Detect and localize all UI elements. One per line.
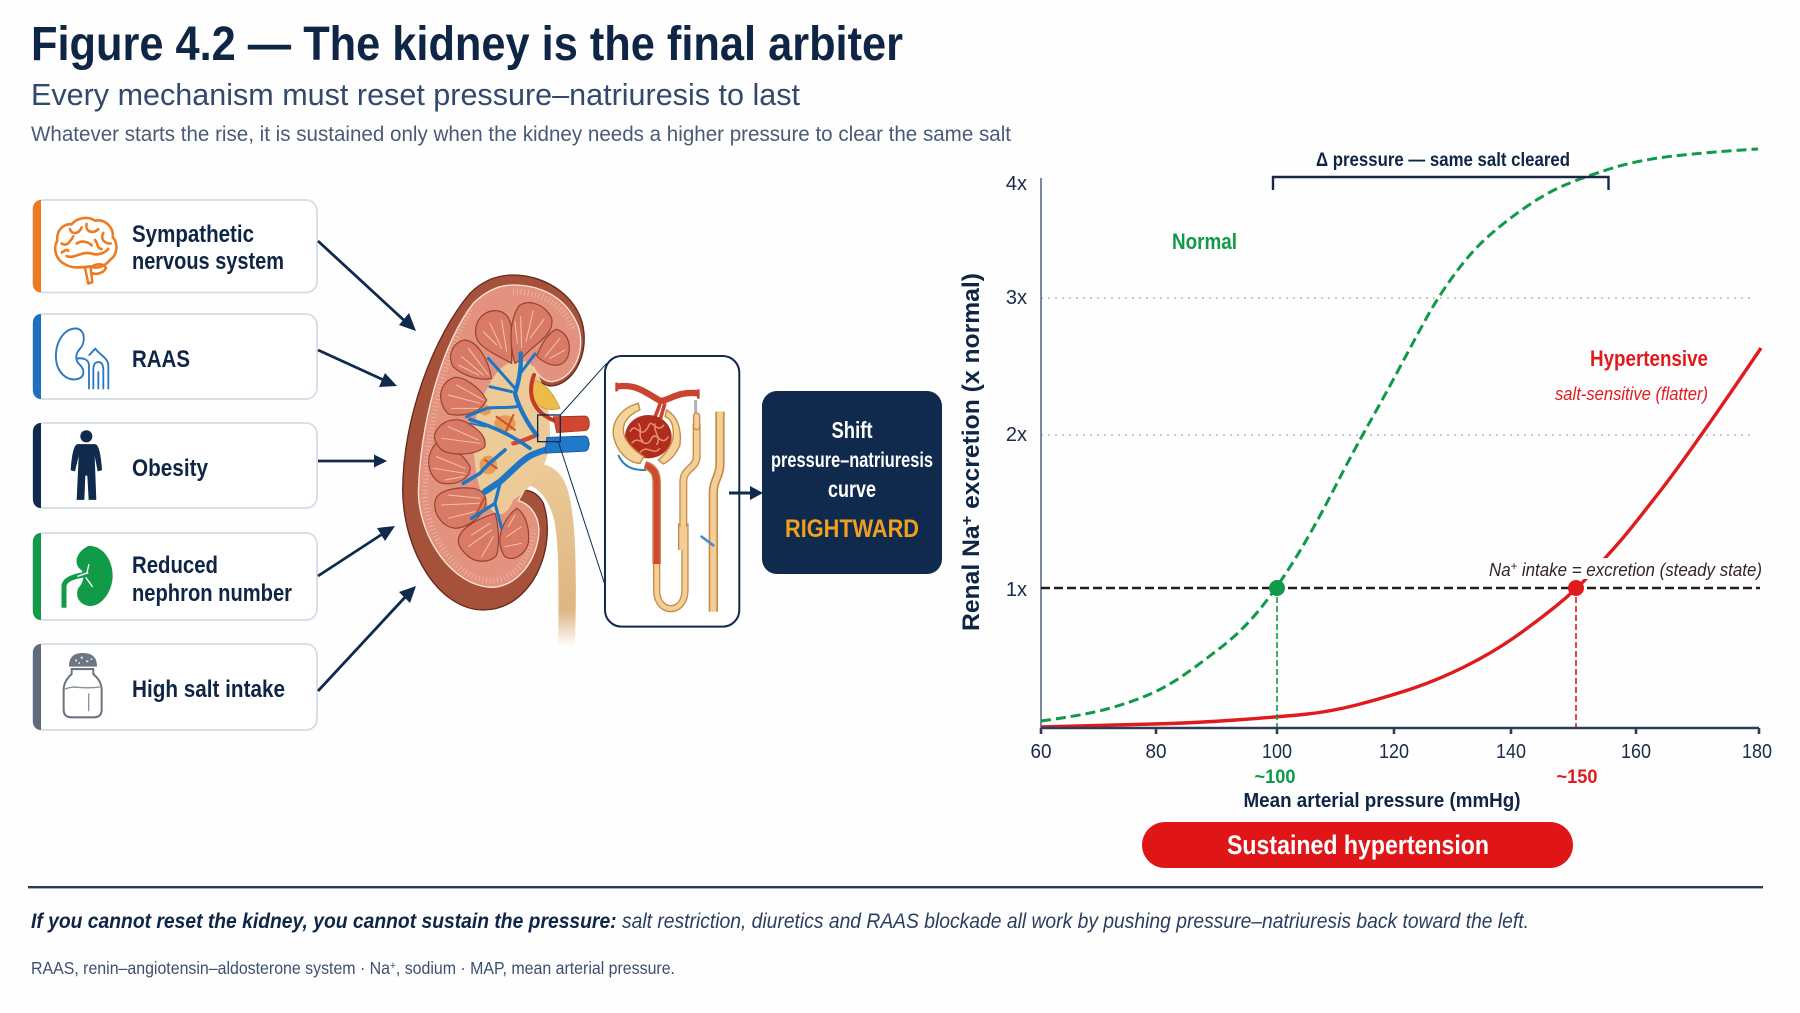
footnote: + xyxy=(390,960,396,972)
x tick labels: 140 xyxy=(1496,741,1526,763)
pill: sustained hypertension xyxy=(1142,822,1573,868)
pyramid streaks xyxy=(433,311,565,557)
card: sympathetic nervous system: nervous system xyxy=(132,248,284,275)
card: reduced nephron number xyxy=(33,533,317,620)
callout: shift curve rightward: Shift xyxy=(832,417,873,443)
arterioles xyxy=(617,386,698,401)
x tick labels: 100 xyxy=(1262,741,1292,763)
x tick labels: 180 xyxy=(1742,741,1772,763)
operating point: normal xyxy=(1269,580,1285,596)
x tick labels: 160 xyxy=(1621,741,1651,763)
illustration: kidney cross-section xyxy=(403,275,607,647)
y axis title: excretion (x normal) xyxy=(958,273,985,516)
bracket: delta pressure: Δ pressure — same salt cleared xyxy=(1316,149,1570,171)
callout: shift curve rightward: pressure–natriuresis xyxy=(771,449,933,472)
y tick labels: 2x xyxy=(1006,424,1027,446)
arrow: inset to shift box xyxy=(729,486,763,500)
card: obesity xyxy=(33,423,317,508)
bracket: delta pressure xyxy=(1273,149,1608,190)
arrows: mechanisms to kidney xyxy=(318,241,416,691)
footnote: , sodium · MAP, mean arterial pressure. xyxy=(396,958,675,978)
label: hypertensive: Hypertensive xyxy=(1590,346,1708,371)
label: High salt intake xyxy=(132,676,285,703)
x axis title: Mean arterial pressure (mmHg) xyxy=(1244,789,1520,812)
card: sympathetic nervous system xyxy=(33,200,317,292)
x tick labels xyxy=(1030,741,1772,763)
icon: person xyxy=(71,430,102,500)
cortex xyxy=(418,285,581,587)
steady state label: Na xyxy=(1489,560,1512,580)
icon: salt shaker xyxy=(64,653,102,717)
renal sinus xyxy=(473,360,550,514)
card: high salt intake xyxy=(33,644,317,730)
label background gap xyxy=(1489,558,1763,579)
x axis xyxy=(1041,728,1759,734)
steady state label: + xyxy=(1511,559,1517,573)
Bowman capsule xyxy=(613,403,644,463)
sinus vessels xyxy=(475,375,565,517)
y axis xyxy=(1040,178,1042,728)
y tick labels: 3x xyxy=(1006,287,1027,309)
y axis title: Renal Na xyxy=(958,528,985,631)
y axis title: + xyxy=(959,516,976,525)
chart: pressure-natriuresis curves xyxy=(958,149,1772,812)
icon: brain xyxy=(55,218,116,284)
arrow: salt to kidney xyxy=(318,586,416,691)
renal vein tree xyxy=(463,353,587,528)
zoom box and guide lines xyxy=(538,363,607,585)
normal curve xyxy=(1041,149,1758,721)
x tick labels: 80 xyxy=(1146,741,1166,763)
steady state label: intake = excretion (steady state) xyxy=(1517,560,1762,580)
takeaway: If you cannot reset the kidney, you cannot sustain the pressure: salt restriction, diuretics and RAAS blockade all work by pushing pressure–natriuresis back toward the left. xyxy=(31,909,1529,933)
icon: green kidney xyxy=(64,546,113,608)
y tick labels: 4x xyxy=(1006,173,1027,195)
icon: kidney and nephron outline xyxy=(56,328,108,388)
callout: shift curve rightward: curve xyxy=(828,476,876,502)
sinus orange patches xyxy=(479,405,516,474)
description line: Whatever starts the rise, it is sustained only when the kidney needs a higher pressure to clear the same salt xyxy=(31,123,1011,146)
operating point: hypertensive xyxy=(1568,580,1584,596)
y tick labels: 1x xyxy=(1006,579,1027,601)
callout: shift curve rightward: RIGHTWARD xyxy=(785,515,919,543)
renal artery xyxy=(553,416,589,433)
title: Figure 4.2 — The kidney is the final arbiter xyxy=(31,18,903,71)
arrow: sympathetic to kidney xyxy=(318,241,416,331)
hypertensive curve xyxy=(1041,348,1761,727)
arrow: nephron number to kidney xyxy=(318,526,395,576)
inset: nephron xyxy=(605,356,739,627)
drop lines xyxy=(1276,588,1278,728)
label: salt-sensitive: salt-sensitive (flatter) xyxy=(1555,384,1708,404)
x tick labels: 120 xyxy=(1379,741,1409,763)
marker: ~150: ~150 xyxy=(1556,766,1598,788)
x tick labels: 60 xyxy=(1030,741,1052,763)
footnote: RAAS, renin–angiotensin–aldosterone system · Na xyxy=(31,958,426,978)
label: Obesity xyxy=(132,455,209,482)
ureter xyxy=(507,464,576,647)
card: reduced nephron number: nephron number xyxy=(132,580,292,607)
callout: shift curve rightward xyxy=(762,391,942,574)
card: RAAS xyxy=(33,314,317,399)
glomerulus xyxy=(625,415,672,458)
label: normal: Normal xyxy=(1172,229,1237,254)
renal vein xyxy=(545,436,589,453)
cortex texture xyxy=(425,292,573,581)
pill: sustained hypertension: Sustained hypertension xyxy=(1227,830,1489,860)
tubule xyxy=(645,412,720,612)
capsule xyxy=(403,275,584,610)
label: RAAS xyxy=(132,346,190,373)
label: Reduced xyxy=(132,552,218,579)
arrow: obesity to kidney xyxy=(318,454,387,468)
pyramids xyxy=(429,303,569,561)
perirenal fat xyxy=(532,380,560,410)
divider xyxy=(28,886,1763,888)
gridlines xyxy=(1041,298,1754,435)
y tick labels xyxy=(1006,173,1027,601)
panel: upstream mechanisms xyxy=(33,200,317,730)
marker: ~100: ~100 xyxy=(1254,766,1296,788)
arrow: RAAS to kidney xyxy=(318,350,397,387)
label: Sympathetic xyxy=(132,221,254,248)
steady state line xyxy=(1041,587,1760,589)
efferent blue sheath xyxy=(618,455,646,470)
subtitle: Every mechanism must reset pressure–natriuresis to last xyxy=(31,78,801,112)
